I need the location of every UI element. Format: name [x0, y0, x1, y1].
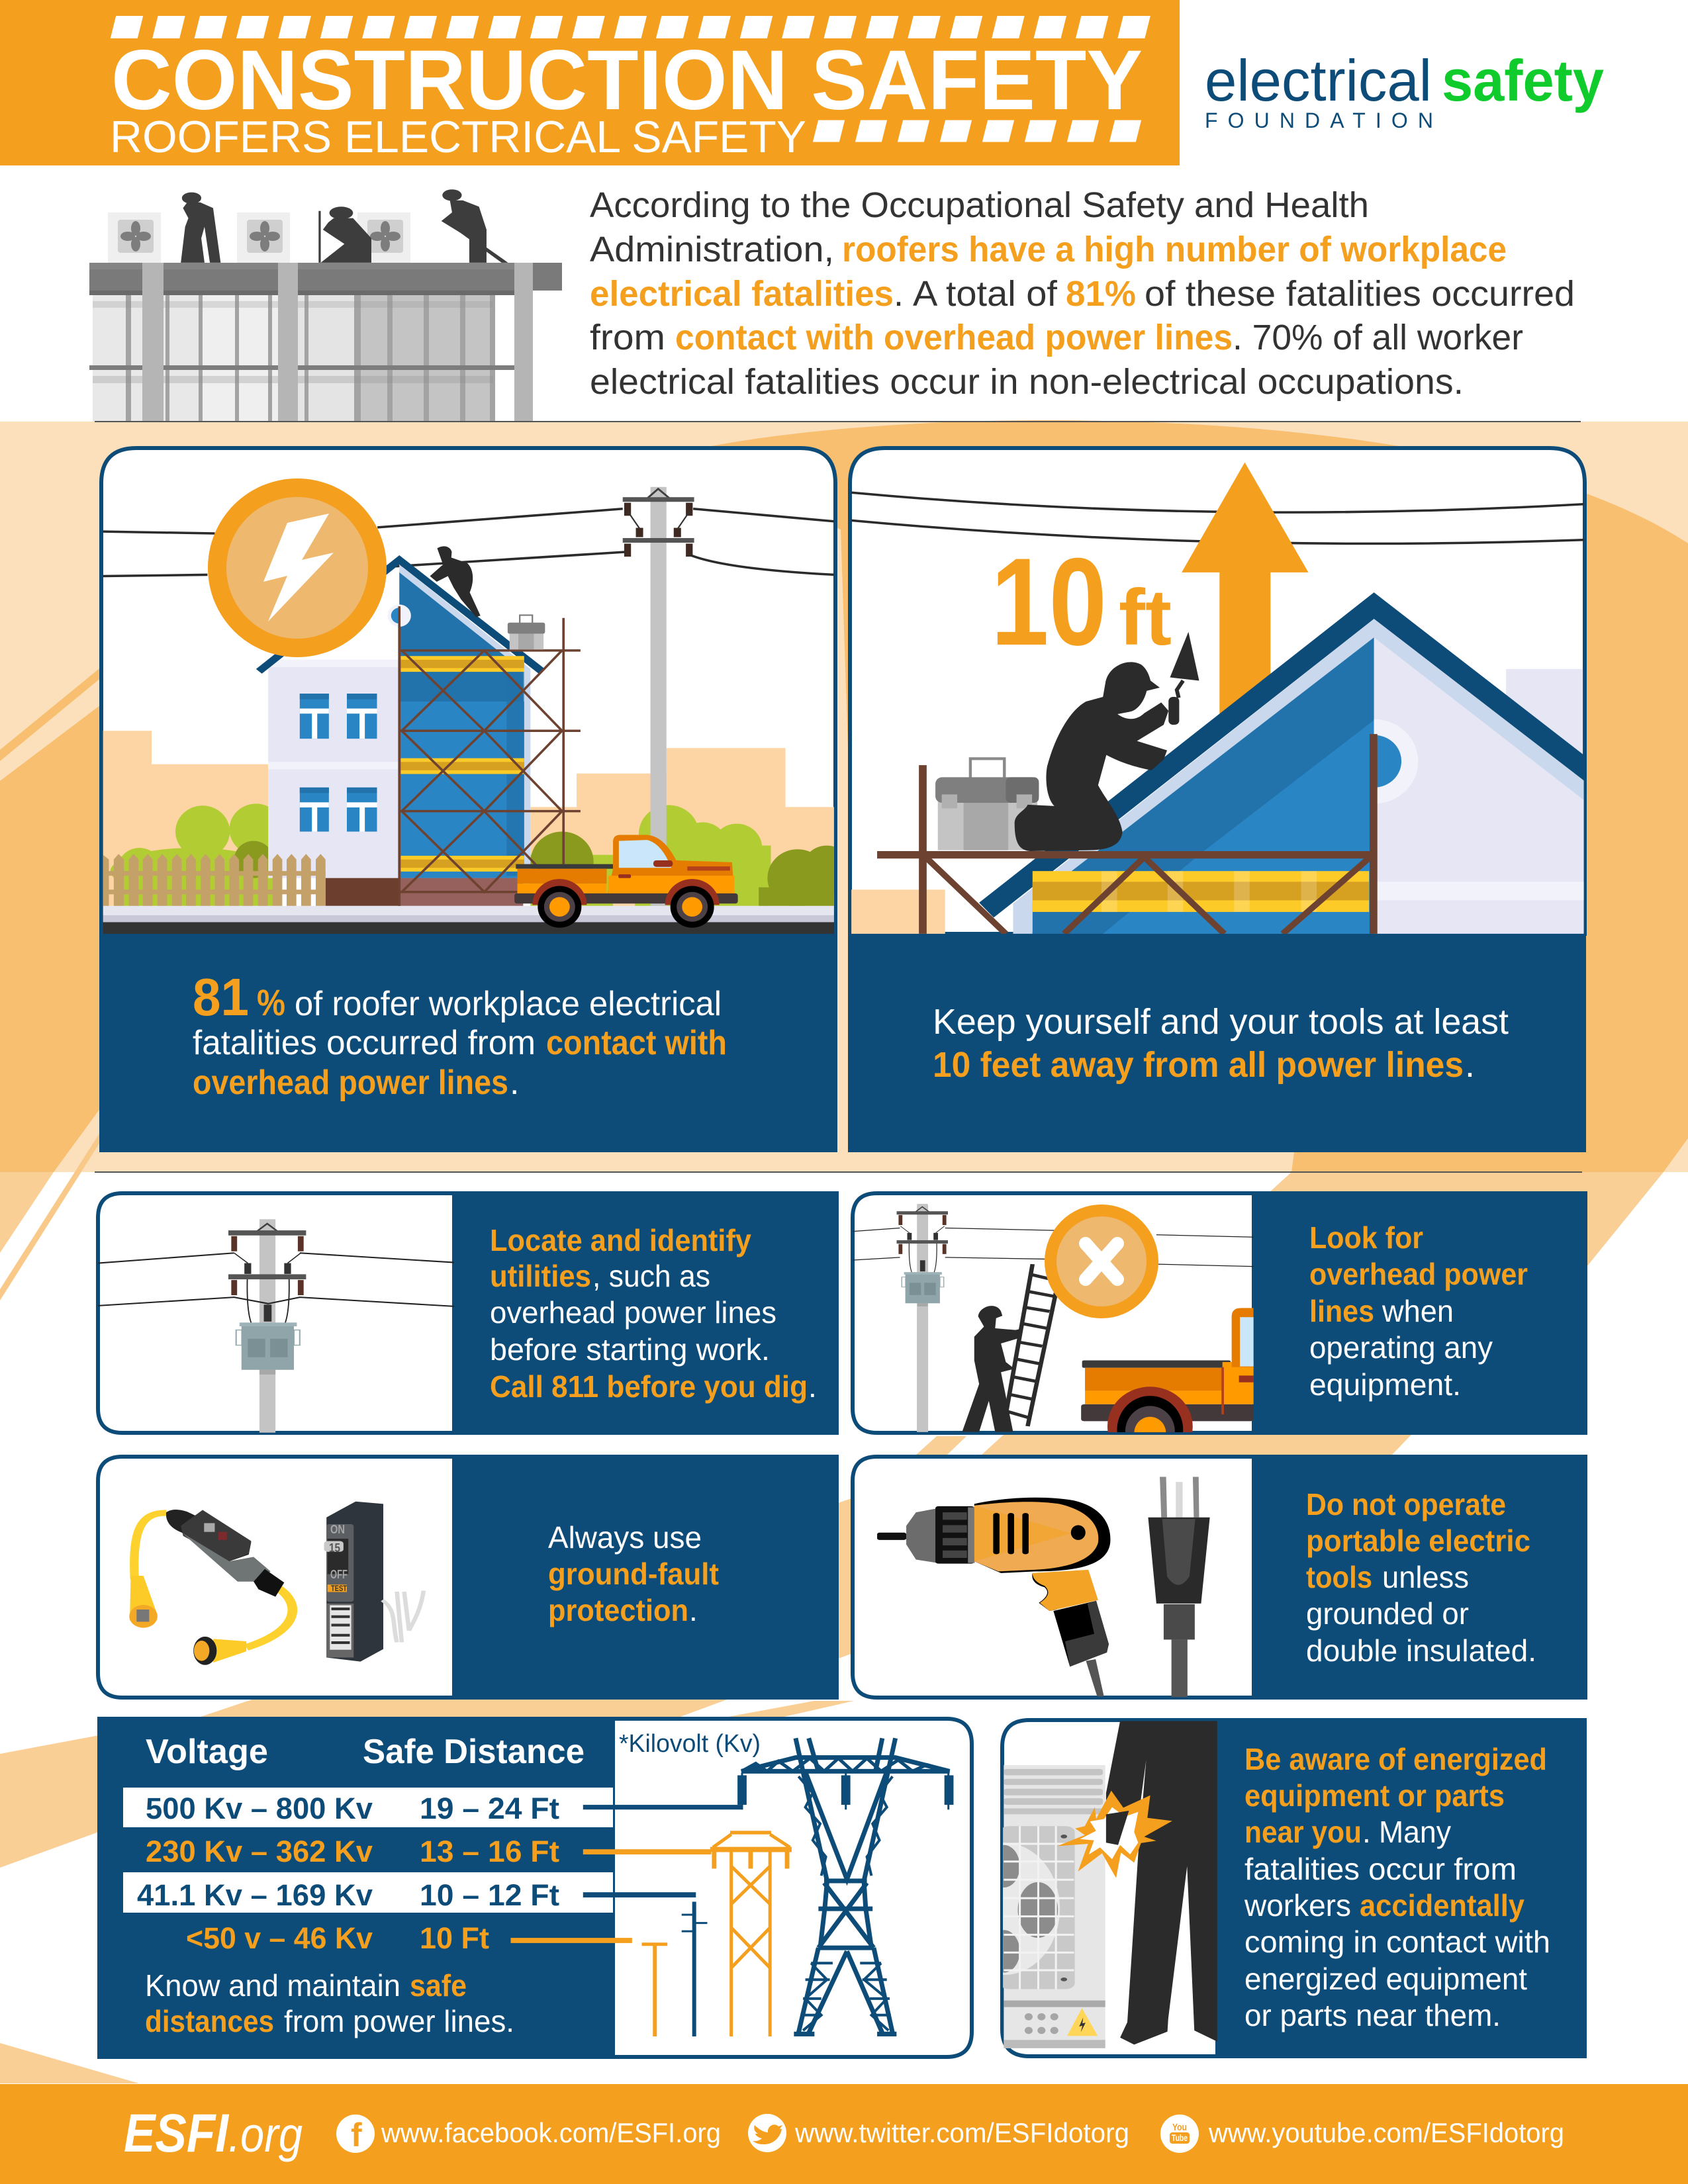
text: 10 feet statement: Keep yourself and your tools at least [933, 1002, 1509, 1042]
icon: youtube [1160, 2115, 1199, 2153]
medium orange tower [713, 1835, 790, 2036]
text: unless [1382, 1560, 1469, 1594]
fence [103, 854, 326, 906]
subtitle: ROOFERS ELECTRICAL SAFETY [110, 112, 806, 162]
link: twitter: www.twitter.com/ESFIdotorg [794, 2117, 1129, 2148]
panel: look for overhead power lines [851, 1191, 1587, 1435]
text: 81 percent statement [193, 968, 727, 1102]
text: 81 percent statement: of roofer workplace electrical [295, 985, 722, 1023]
intro paragraph: According to the Occupational Safety and Health [590, 185, 1369, 225]
ladder [1006, 1264, 1056, 1426]
breaker labels: 15 [329, 1541, 340, 1555]
icon: facebook: f [351, 2116, 362, 2154]
panel: ground-fault protection [98, 1455, 839, 1700]
text: 10 feet statement [933, 1002, 1509, 1085]
panel: 81 percent [99, 448, 851, 1152]
intro paragraph: contact with overhead power lines [675, 318, 1233, 357]
lower hazard stripes [816, 120, 1139, 142]
text: 81 percent statement: overhead power lines [193, 1064, 508, 1102]
text [548, 1520, 719, 1627]
text: energized equipment [1244, 1962, 1527, 1996]
wires [103, 509, 834, 576]
text: coming in contact with [1244, 1925, 1550, 1959]
text: protection [548, 1593, 688, 1627]
text: , such as [592, 1259, 710, 1293]
logo: electrical safety foundation: FOUNDATION [1205, 109, 1433, 132]
text: Always use [548, 1520, 702, 1555]
worker silhouettes [181, 189, 508, 263]
text: know and maintain: safe [410, 1968, 467, 2003]
icon: lightning bolt badge [208, 478, 387, 657]
roofer silhouette with trowel [1015, 632, 1199, 851]
text: 81 percent statement: contact with [546, 1024, 727, 1062]
header banner [0, 0, 1180, 165]
chart: tower heights [510, 1738, 953, 2036]
text: portable electric [1306, 1524, 1530, 1558]
wires [851, 492, 1584, 543]
text: lines [1309, 1294, 1374, 1328]
arrow up [1182, 463, 1309, 718]
text: near you [1244, 1815, 1362, 1849]
intro paragraph: 81% [1066, 274, 1136, 314]
text: when [1382, 1294, 1454, 1328]
table rows: 41.1 Kv – 169 Kv [137, 1878, 373, 1912]
table rows: 19 – 24 Ft [420, 1792, 559, 1825]
text: know and maintain: from power lines. [284, 2004, 514, 2038]
breaker labels: ON [330, 1523, 345, 1536]
text: grounded or [1306, 1596, 1469, 1631]
rooftop fans [108, 212, 410, 263]
intro paragraph [590, 185, 1575, 402]
intro paragraph: Administration, [590, 230, 834, 269]
text: know and maintain: Know and maintain [145, 1968, 400, 2003]
text: operating any [1309, 1330, 1493, 1365]
illustration: drill and plug [877, 1477, 1210, 1697]
text: 81 percent statement: % [257, 981, 285, 1023]
footer logo: ESFI.org: ESFI [124, 2103, 230, 2163]
top hazard stripes [113, 16, 1149, 38]
text: . [689, 1593, 698, 1627]
text: . [1362, 1815, 1371, 1849]
text [1244, 1742, 1550, 2032]
table rows: 10 Ft [420, 1921, 489, 1955]
logo: electrical safety foundation [1205, 48, 1604, 132]
table rows: 500 Kv – 800 Kv [146, 1792, 373, 1825]
illustration: utility pole [98, 1219, 454, 1433]
footer logo: ESFI.org: .org [228, 2107, 303, 2162]
icon: X badge [1045, 1205, 1158, 1318]
text [1306, 1487, 1536, 1668]
scaffold [877, 734, 1374, 934]
icon: youtube: Tube [1172, 2132, 1188, 2143]
note: kilovolt: *Kilovolt (Kv) [619, 1730, 761, 1758]
illustration: GFCI cord and breaker [129, 1502, 424, 1665]
text: Do not operate [1306, 1487, 1506, 1522]
text: workers [1244, 1888, 1351, 1923]
text: equipment. [1309, 1367, 1461, 1402]
house [268, 660, 399, 878]
panel: portable electric tools [853, 1455, 1587, 1700]
scaffold [399, 606, 581, 906]
text: Look for [1309, 1220, 1423, 1255]
link: youtube: www.youtube.com/ESFIdotorg [1208, 2117, 1564, 2148]
logo: electrical safety foundation: safety [1442, 48, 1604, 113]
toolbox [508, 615, 545, 649]
text: double insulated. [1306, 1633, 1536, 1668]
text: or parts near them. [1244, 1998, 1501, 2032]
text: 81 percent statement: fatalities occurred from [193, 1024, 536, 1062]
text: Call 811 before you dig [490, 1369, 808, 1404]
worker silhouette [962, 1306, 1023, 1432]
text: . [808, 1369, 817, 1404]
toolbox [935, 758, 1039, 850]
link: facebook: www.facebook.com/ESFI.org [381, 2117, 721, 2148]
truck [1082, 1361, 1231, 1368]
illustration: roofers on a building [89, 189, 562, 422]
10 ft label: 10 [991, 532, 1107, 671]
text: fatalities occur from [1244, 1852, 1517, 1886]
table rows: 10 – 12 Ft [420, 1878, 559, 1912]
truck [514, 835, 738, 928]
text: overhead power [1309, 1257, 1528, 1291]
text: overhead power lines [490, 1295, 776, 1330]
intro paragraph: A total of [913, 274, 1058, 314]
text: Be aware of energized [1244, 1742, 1547, 1776]
intro paragraph: from [590, 318, 665, 357]
illustration: roofer kneeling under power lines [851, 463, 1584, 934]
intro paragraph: roofers have a high number of workplace [842, 230, 1507, 269]
text: 81 percent statement: 81 [193, 968, 249, 1026]
text: before starting work. [490, 1332, 770, 1367]
logo: electrical safety foundation: electrical [1205, 48, 1432, 113]
text: 10 feet statement: 10 feet away from all power lines [933, 1045, 1464, 1085]
text: accidentally [1360, 1888, 1524, 1923]
roofer silhouette [430, 546, 481, 617]
intro paragraph: electrical fatalities occur in non-electrical occupations. [590, 362, 1464, 402]
road [103, 906, 834, 915]
table rows: 230 Kv – 362 Kv [146, 1835, 373, 1868]
table rows [137, 1792, 559, 1955]
title: CONSTRUCTION SAFETY [111, 33, 1143, 128]
navy pole [692, 1901, 696, 2036]
icon: twitter [748, 2114, 786, 2152]
breaker labels: TEST [331, 1584, 348, 1593]
table headers: Safe Distance [363, 1733, 585, 1771]
intro paragraph: electrical fatalities [590, 274, 894, 314]
intro paragraph: of these fatalities occurred [1145, 274, 1575, 314]
text: know and maintain [145, 1968, 514, 2038]
breaker labels [329, 1523, 348, 1593]
panel: energized equipment [948, 1718, 1587, 2058]
text: 10 feet statement: . [1465, 1045, 1475, 1085]
text: utilities [490, 1259, 591, 1293]
panel: locate and identify utilities [98, 1191, 839, 1435]
text [1309, 1220, 1528, 1402]
text: Many [1379, 1815, 1451, 1849]
breaker labels: OFF [330, 1568, 348, 1581]
bushes [111, 803, 851, 907]
panel: 10 feet [848, 448, 1586, 1152]
table headers [146, 1733, 585, 1771]
table rows: <50 v – 46 Kv [186, 1921, 373, 1955]
worker silhouette [1106, 1721, 1217, 2044]
text [490, 1223, 817, 1404]
plug [1160, 1477, 1199, 1518]
large tower [741, 1738, 949, 2033]
insulators [742, 1773, 949, 1809]
connector bars [583, 1805, 743, 1809]
footer logo: ESFI.org [124, 2103, 303, 2163]
spark [1057, 1791, 1172, 1878]
text: 81 percent statement: . [510, 1064, 519, 1102]
panel: voltage safe distance table [97, 1717, 972, 2059]
pole [651, 487, 667, 906]
text: ground-fault [548, 1557, 719, 1591]
intro paragraph: . [894, 274, 904, 314]
icon: youtube: You [1172, 2122, 1187, 2133]
footer [0, 2084, 1688, 2184]
roof and wall [1374, 637, 1584, 934]
illustration: house, roofer, pole, truck [103, 487, 851, 934]
text: know and maintain: distances [145, 2004, 274, 2038]
text: tools [1306, 1560, 1372, 1594]
text: Locate and identify [490, 1223, 751, 1257]
illustration: worker touching AC unit [1003, 1721, 1217, 2048]
table rows: 13 – 16 Ft [420, 1835, 559, 1868]
text: equipment or parts [1244, 1778, 1505, 1813]
windows [300, 694, 377, 832]
intro paragraph: . 70% of all worker [1233, 318, 1523, 357]
table headers: Voltage [146, 1733, 268, 1771]
10 ft label: ft [1119, 573, 1172, 662]
icon: facebook [336, 2115, 375, 2154]
small orange pole [653, 1944, 657, 2036]
illustration: worker with ladder, truck, warning [853, 1204, 1254, 1432]
